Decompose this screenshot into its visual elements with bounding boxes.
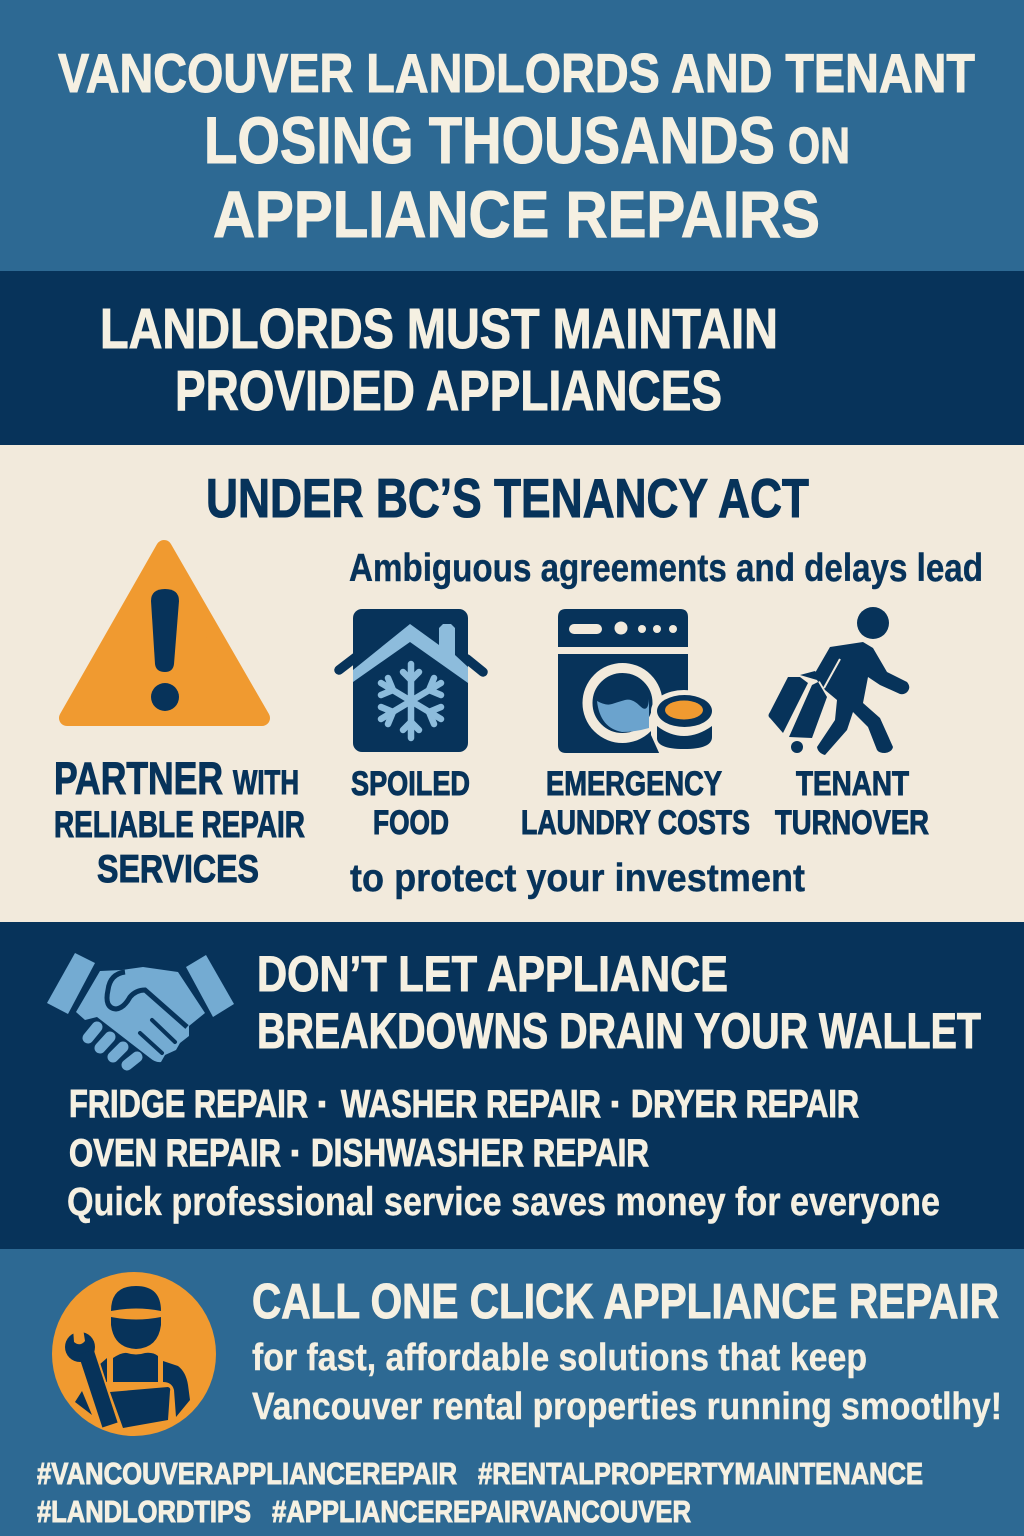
text: repair services list: FRIDGE REPAIR	[69, 1083, 308, 1126]
icon: repair technician	[52, 1272, 216, 1436]
label: tenant turnover: TURNOVER	[775, 804, 929, 842]
text: hashtags	[37, 1456, 923, 1529]
text: repair services list: ·	[610, 1083, 622, 1126]
icon: warning triangle	[67, 548, 262, 718]
text: repair services list: ·	[290, 1132, 302, 1175]
heading: under BC's tenancy act: UNDER BC’S TENANCY ACT	[206, 467, 809, 529]
text: repair services list	[69, 1083, 859, 1175]
text: repair services list: ·	[316, 1083, 330, 1126]
text: repair services list: WASHER REPAIR	[341, 1083, 601, 1126]
heading: landlords must maintain	[100, 297, 778, 423]
label: emergency laundry costs	[521, 765, 750, 842]
text: fast affordable solutions: for fast, affordable solutions that keep	[252, 1337, 867, 1379]
label: spoiled food: FOOD	[373, 804, 449, 842]
text: partner with reliable repair services: WITH	[233, 764, 299, 802]
label: emergency laundry costs: LAUNDRY COSTS	[521, 804, 750, 842]
label: tenant turnover	[775, 765, 929, 842]
text: partner with reliable repair services	[54, 753, 305, 891]
icon: handshake	[47, 953, 234, 1065]
icon: washing machine with coins	[558, 609, 717, 755]
panel: under BC's tenancy act	[0, 445, 1024, 922]
text: repair services list: OVEN REPAIR	[69, 1132, 281, 1175]
panel: don't let appliance breakdowns	[0, 922, 1024, 1249]
heading: don't let appliance breakdowns	[257, 946, 981, 1059]
text: hashtags: #VANCOUVERAPPLIANCEREPAIR	[37, 1456, 457, 1491]
text: to protect your investment: to protect your investment	[350, 857, 805, 900]
icon: house with snowflake	[339, 609, 483, 752]
icon: tenant with suitcase	[768, 607, 909, 755]
text: hashtags: #RENTALPROPERTYMAINTENANCE	[478, 1456, 923, 1491]
text: repair services list: DRYER REPAIR	[631, 1083, 859, 1126]
text: partner with reliable repair services: RELIABLE REPAIR	[54, 804, 305, 845]
panel: landlords must maintain	[0, 271, 1024, 445]
panel: call to action	[0, 1249, 1024, 1536]
text: hashtags: #LANDLORDTIPS	[37, 1494, 251, 1529]
label: emergency laundry costs: EMERGENCY	[546, 765, 722, 803]
panel: title band	[0, 0, 1024, 271]
text: fast affordable solutions	[252, 1337, 1002, 1428]
text: partner with reliable repair services: PARTNER	[54, 753, 223, 804]
title	[58, 42, 975, 251]
label: spoiled food	[351, 765, 470, 842]
label: tenant turnover: TENANT	[796, 765, 909, 803]
label: spoiled food: SPOILED	[351, 765, 470, 803]
heading: don't let appliance breakdowns: DON’T LET APPLIANCE	[257, 946, 728, 1002]
text: partner with reliable repair services: SERVICES	[97, 848, 259, 891]
heading: landlords must maintain: PROVIDED APPLIANCES	[175, 359, 722, 423]
heading: landlords must maintain: LANDLORDS MUST MAINTAIN	[100, 297, 778, 361]
text: hashtags: #APPLIANCEREPAIRVANCOUVER	[272, 1494, 691, 1529]
text: repair services list: DISHWASHER REPAIR	[311, 1132, 649, 1175]
title: ON	[788, 117, 850, 174]
title: LOSING THOUSANDS	[204, 103, 775, 177]
title: APPLIANCE REPAIRS	[213, 177, 820, 251]
